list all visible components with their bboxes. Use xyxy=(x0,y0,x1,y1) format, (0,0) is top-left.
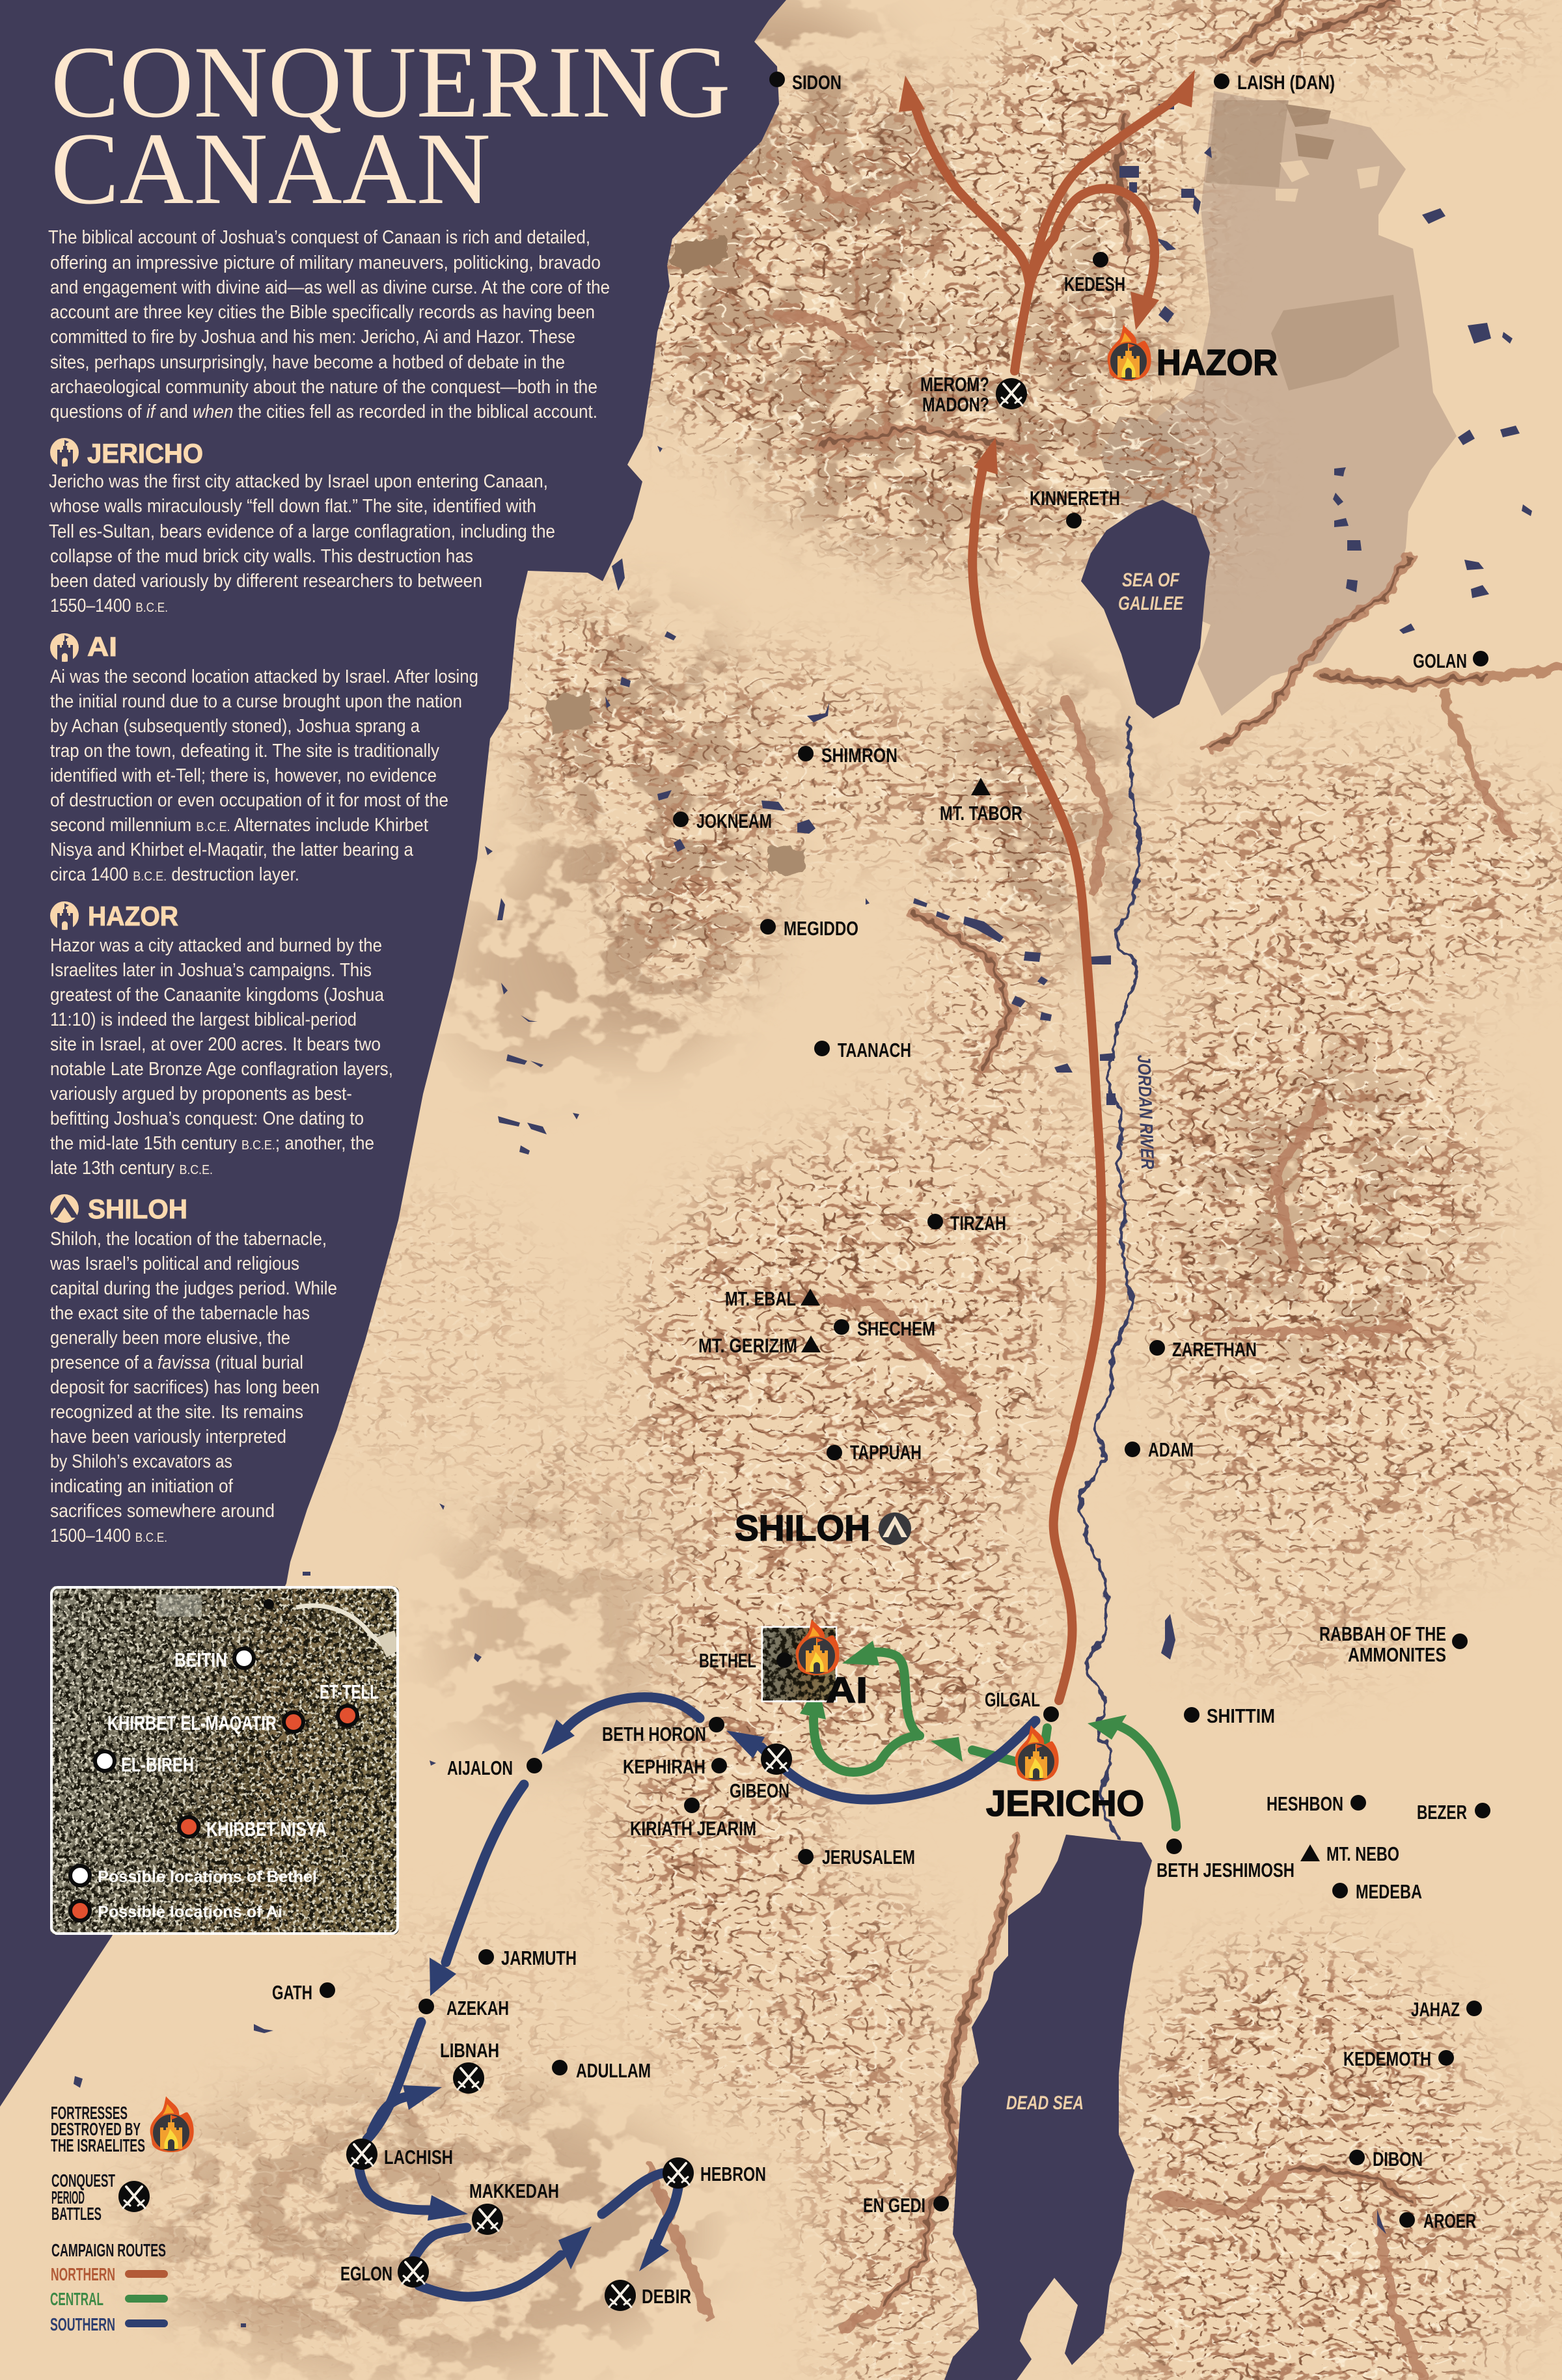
text: Shiloh: recognized at the site. Its remains xyxy=(50,1402,303,1423)
text: Hazor: notable Late Bronze Age conflagration layers, xyxy=(50,1059,393,1080)
route: southern campaign xyxy=(359,1697,1035,2297)
panel: Ai xyxy=(50,631,478,885)
city: Tappuah: TAPPUAH xyxy=(850,1441,922,1464)
legend xyxy=(50,2096,194,2334)
route: northern campaign xyxy=(899,70,1195,1701)
city: Kedemoth: KEDEMOTH xyxy=(1343,2047,1431,2070)
city: Shechem: SHECHEM xyxy=(857,1317,935,1340)
mountain: Mt. Gerizim: MT. GERIZIM xyxy=(698,1334,797,1357)
city: Adullam xyxy=(552,2059,651,2082)
title: CANAAN xyxy=(51,112,491,226)
icon: tent Shiloh xyxy=(50,1194,79,1223)
city: Bethel: BETHEL xyxy=(699,1649,756,1672)
mountain: Mt. Nebo xyxy=(1300,1842,1399,1865)
battle: Hebron xyxy=(663,2157,766,2189)
city: Jokneam: JOKNEAM xyxy=(696,810,772,832)
city: Aroer: AROER xyxy=(1423,2209,1476,2232)
arrowheads: northern xyxy=(899,70,1195,474)
sea xyxy=(0,0,786,2107)
intro text block: archaeological community about the nature of the conquest—both in the xyxy=(50,377,597,398)
city: Dibon xyxy=(1349,2148,1423,2170)
text: Ai: trap on the town, defeating it. The site is traditionally xyxy=(50,741,439,761)
city: Sidon: SIDON xyxy=(792,71,842,94)
city: Zarethan: ZARETHAN xyxy=(1172,1338,1257,1361)
city: Medeba xyxy=(1332,1880,1422,1903)
text: Jericho: Jericho was the first city attacked by Israel upon entering Canaan, xyxy=(49,471,548,492)
city: Shiloh: SHILOH xyxy=(735,1507,870,1548)
text: Hazor: 11:10) is indeed the largest biblical-period xyxy=(50,1009,357,1030)
inset legend: Ai: Possible locations of Ai xyxy=(98,1903,282,1921)
panel: Shiloh xyxy=(49,1194,337,1546)
text: Hazor: befitting Joshua’s conquest: One dating to xyxy=(50,1108,364,1129)
city: Shechem xyxy=(834,1317,935,1340)
legend: campaign routes: NORTHERN xyxy=(51,2264,115,2284)
text: Shiloh: presence of a favissa (ritual burial xyxy=(50,1352,303,1373)
title xyxy=(51,25,731,226)
terrain: gorges and major ridgelines xyxy=(547,0,1562,2380)
battle: Libnah: LIBNAH xyxy=(440,2039,499,2062)
legend: campaign routes: CENTRAL xyxy=(50,2289,103,2309)
battle: Hebron: HEBRON xyxy=(700,2163,766,2185)
text: Jericho: Tell es-Sultan, bears evidence of a large conflagration, including the xyxy=(49,521,555,542)
battle: Lachish: LACHISH xyxy=(384,2146,453,2168)
text: Jericho: collapse of the mud brick city walls. This destruction has xyxy=(50,546,473,567)
battle: Merom / Madon: MEROM? xyxy=(920,373,989,396)
text: Ai: Nisya and Khirbet el-Maqatir, the latter bearing a xyxy=(50,840,414,860)
city: Azekah xyxy=(418,1997,509,2019)
city: Gilgal: GILGAL xyxy=(985,1688,1040,1711)
city: Heshbon: HESHBON xyxy=(1267,1792,1343,1815)
text: Shiloh: deposit for sacrifices) has long been xyxy=(50,1377,320,1398)
site: Khirbet Nisya: KHIRBET NISYA xyxy=(206,1818,327,1840)
city: Shimron: SHIMRON xyxy=(821,744,897,767)
intro text block xyxy=(48,227,610,422)
city: Jerusalem xyxy=(798,1846,915,1868)
battle: Debir: DEBIR xyxy=(642,2285,691,2308)
text: Hazor: Hazor was a city attacked and burned by the xyxy=(50,935,382,956)
site: Khirbet Nisya xyxy=(179,1817,327,1840)
city: Gilgal xyxy=(985,1688,1059,1722)
text: Jericho: been dated variously by different researchers to between xyxy=(50,571,482,592)
battle: Libnah xyxy=(440,2039,499,2094)
city: Beth Jeshimosh xyxy=(1157,1839,1295,1881)
heading: Jericho: JERICHO xyxy=(87,438,203,469)
text: Hazor xyxy=(50,935,393,1179)
text: Ai: Ai was the second location attacked by Israel. After losing xyxy=(50,666,478,687)
city: Rabbah of the Ammonites: AMMONITES xyxy=(1348,1643,1446,1666)
text: Hazor: greatest of the Canaanite kingdoms (Joshua xyxy=(50,985,385,1005)
city: Tappuah xyxy=(827,1441,922,1464)
text: Shiloh: by Shiloh’s excavators as xyxy=(50,1451,232,1472)
city: Medeba: MEDEBA xyxy=(1356,1880,1422,1903)
mountain: Mt. Tabor xyxy=(940,778,1022,825)
text: Hazor: Israelites later in Joshua’s campaigns. This xyxy=(50,960,372,981)
city: Jokneam xyxy=(673,810,772,832)
city: Adullam: ADULLAM xyxy=(576,2059,651,2082)
city: Gath: GATH xyxy=(272,1981,312,2004)
city: Zarethan xyxy=(1149,1338,1257,1361)
heading: Ai: AI xyxy=(87,631,117,662)
panel: Jericho xyxy=(49,438,555,616)
city: Laish (Dan) xyxy=(1214,71,1335,94)
text: Hazor: variously argued by proponents as best- xyxy=(50,1084,352,1104)
text: Hazor: the mid-late 15th century B.C.E.; another, the xyxy=(50,1133,374,1154)
legend: conquest period battles: BATTLES xyxy=(51,2204,102,2224)
city: Hazor: HAZOR xyxy=(1157,342,1278,383)
lake label: GALILEE xyxy=(1118,593,1184,614)
city: Hazor xyxy=(1108,325,1278,383)
city: Adam xyxy=(1125,1438,1194,1461)
city: Shittim: SHITTIM xyxy=(1207,1704,1275,1727)
city: Taanach: TAANACH xyxy=(838,1039,911,1061)
city: Rabbah of the Ammonites xyxy=(1319,1622,1468,1666)
city: Aroer xyxy=(1399,2209,1476,2232)
battle: Gibeon: GIBEON xyxy=(730,1779,789,1802)
intro text block: offering an impressive picture of military maneuvers, politicking, bravado xyxy=(50,253,601,273)
small satellite tile at Ai xyxy=(762,1627,836,1701)
Dead Sea xyxy=(944,1835,1152,2380)
intro text block: The biblical account of Joshua’s conquest of Canaan is rich and detailed, xyxy=(48,227,590,248)
city: Adam: ADAM xyxy=(1148,1438,1194,1461)
city: Kinnereth: KINNERETH xyxy=(1030,487,1120,510)
intro text block: sites, perhaps unsurprisingly, have become a hotbed of debate in the xyxy=(50,352,565,373)
city: Kiriath Jearim: KIRIATH JEARIM xyxy=(630,1817,756,1840)
battle: Lachish xyxy=(346,2139,453,2170)
legend: campaign routes: CAMPAIGN ROUTES xyxy=(51,2240,166,2260)
Jordan River xyxy=(1080,716,1158,1839)
text: Ai: circa 1400 B.C.E. destruction layer. xyxy=(50,864,299,885)
icon: fortress Hazor xyxy=(50,901,79,931)
legend: conquest period battles: CONQUEST xyxy=(51,2170,115,2191)
inset: satellite map of Bethel and Ai xyxy=(50,1586,400,1935)
site: El-Bireh: EL-BIREH xyxy=(121,1753,194,1776)
text: Jericho: 1550–1400 B.C.E. xyxy=(50,595,168,616)
route: central campaign xyxy=(800,1641,1176,1827)
battle: Eglon xyxy=(340,2256,429,2288)
intro text block: and engagement with divine aid—as well as divine curse. At the core of the xyxy=(50,277,610,298)
site: Et-Tell xyxy=(320,1680,379,1725)
legend: campaign routes xyxy=(50,2240,166,2334)
text: Jericho: whose walls miraculously “fell down flat.” The site, identified with xyxy=(49,496,536,517)
text: Ai: identified with et-Tell; there is, however, no evidence xyxy=(50,765,437,786)
text: Ai: second millennium B.C.E. Alternates include Khirbet xyxy=(50,815,428,836)
city: Taanach xyxy=(814,1039,911,1061)
text: Shiloh: 1500–1400 B.C.E. xyxy=(50,1525,167,1546)
city: Ai xyxy=(796,1619,868,1710)
site: El-Bireh xyxy=(95,1751,194,1776)
icon: fortress Ai xyxy=(50,633,79,663)
city: Aijalon: AIJALON xyxy=(447,1757,513,1779)
city: Jahaz: JAHAZ xyxy=(1411,1998,1460,2021)
city: Ai: AI xyxy=(826,1669,868,1710)
battle: Makkedah xyxy=(469,2180,559,2235)
city: Bezer: BEZER xyxy=(1417,1801,1467,1824)
text: Shiloh: sacrifices somewhere around xyxy=(50,1501,275,1522)
arrowheads: southern xyxy=(403,1719,765,2271)
city: Tirzah xyxy=(927,1212,1006,1235)
text: Jericho xyxy=(49,471,555,616)
city: Megiddo xyxy=(760,917,858,940)
city: Beth Jeshimosh: BETH JESHIMOSH xyxy=(1157,1859,1295,1881)
city: Kedesh: KEDESH xyxy=(1064,273,1125,295)
battle: Merom / Madon: MADON? xyxy=(922,393,989,416)
text: Ai: of destruction or even occupation of it for most of the xyxy=(50,790,448,811)
battle: Makkedah: MAKKEDAH xyxy=(469,2180,559,2202)
city: Laish (Dan): LAISH (DAN) xyxy=(1237,71,1335,94)
icon: fortress Jericho xyxy=(50,438,79,467)
city: Jarmuth: JARMUTH xyxy=(501,1947,577,1969)
text: Ai xyxy=(50,666,478,885)
legend: fortresses destroyed: THE ISRAELITES xyxy=(51,2135,145,2155)
battle: Merom / Madon xyxy=(920,373,1027,416)
text: Shiloh: Shiloh, the location of the tabernacle, xyxy=(50,1229,327,1250)
site: Beitin: BEITIN xyxy=(174,1648,227,1671)
panel: Hazor xyxy=(50,901,393,1179)
battle: Debir xyxy=(605,2280,691,2311)
city: Beth Horon: BETH HORON xyxy=(602,1723,706,1745)
lake label xyxy=(1118,569,1184,614)
city: Megiddo: MEGIDDO xyxy=(784,917,858,940)
text: Shiloh: have been variously interpreted xyxy=(50,1427,286,1447)
text: Shiloh: was Israel’s political and religious xyxy=(49,1253,299,1274)
legend: campaign routes: SOUTHERN xyxy=(50,2314,115,2334)
text: Shiloh xyxy=(49,1229,337,1546)
city: En Gedi: EN GEDI xyxy=(863,2194,925,2217)
text: Ai: the initial round due to a curse brought upon the nation xyxy=(50,691,462,712)
lake label: SEA OF xyxy=(1122,569,1180,591)
city: Azekah: AZEKAH xyxy=(446,1997,509,2019)
city: Kinnereth xyxy=(1030,487,1120,528)
intro text block: account are three key cities the Bible specifically records as having been xyxy=(50,302,595,323)
legend: fortresses destroyed: DESTROYED BY xyxy=(51,2119,141,2139)
text: Hazor: site in Israel, at over 200 acres. It bears two xyxy=(50,1034,381,1055)
arrowheads: central xyxy=(800,1641,1127,1762)
city: Jarmuth xyxy=(478,1947,577,1969)
Sea of Galilee xyxy=(1081,500,1210,718)
river label: JORDAN RIVER xyxy=(1134,1054,1158,1170)
mountain: Mt. Nebo: MT. NEBO xyxy=(1326,1842,1399,1865)
city: Kedesh xyxy=(1064,252,1125,295)
intro text block: committed to fire by Joshua and his men: Jericho, Ai and Hazor. These xyxy=(50,327,575,348)
city: Shittim xyxy=(1184,1704,1275,1727)
heading: Hazor: HAZOR xyxy=(88,901,178,931)
text: Shiloh: capital during the judges period. While xyxy=(50,1278,337,1299)
city: Kiriath Jearim xyxy=(630,1798,756,1840)
inset legend: Bethel: Possible locations of Bethel xyxy=(98,1868,317,1886)
mountain: Mt. Tabor: MT. TABOR xyxy=(940,802,1022,825)
legend: conquest period battles xyxy=(51,2170,150,2224)
text: Hazor: late 13th century B.C.E. xyxy=(50,1158,213,1179)
heading: Shiloh: SHILOH xyxy=(88,1194,187,1224)
terrain: Golan plain xyxy=(1100,91,1457,716)
text: Ai: by Achan (subsequently stoned), Joshua sprang a xyxy=(50,716,420,737)
city: Shimron xyxy=(798,744,897,767)
battle: Eglon: EGLON xyxy=(340,2262,392,2285)
city: Kephirah: KEPHIRAH xyxy=(623,1755,706,1778)
text: Shiloh: indicating an initiation of xyxy=(50,1476,234,1497)
site: Et-Tell: ET-TELL xyxy=(320,1680,379,1703)
legend: fortresses destroyed xyxy=(51,2096,194,2155)
city: Jericho xyxy=(986,1725,1144,1824)
city: Rabbah of the Ammonites: RABBAH OF THE xyxy=(1319,1622,1446,1645)
site: Khirbet el-Maqatir: KHIRBET EL-MAQATIR xyxy=(107,1712,277,1734)
city: Jerusalem: JERUSALEM xyxy=(822,1846,915,1868)
text: Shiloh: generally been more elusive, the xyxy=(50,1328,290,1348)
mountain: Mt. Ebal: MT. EBAL xyxy=(725,1287,796,1310)
city: Jericho: JERICHO xyxy=(986,1783,1144,1824)
battle: Gibeon xyxy=(730,1744,792,1802)
legend: conquest period battles: PERIOD xyxy=(51,2187,85,2208)
city: Dibon: DIBON xyxy=(1373,2148,1423,2170)
city: Golan: GOLAN xyxy=(1413,650,1467,672)
city: Tirzah: TIRZAH xyxy=(950,1212,1006,1235)
text: Shiloh: the exact site of the tabernacle has xyxy=(50,1303,310,1324)
intro text block: questions of if and when the cities fell as recorded in the biblical account. xyxy=(50,402,597,422)
lake label: DEAD SEA xyxy=(1006,2092,1084,2114)
city: Sidon xyxy=(769,71,842,94)
legend: fortresses destroyed: FORTRESSES xyxy=(51,2103,128,2123)
title: CONQUERING xyxy=(51,25,731,139)
